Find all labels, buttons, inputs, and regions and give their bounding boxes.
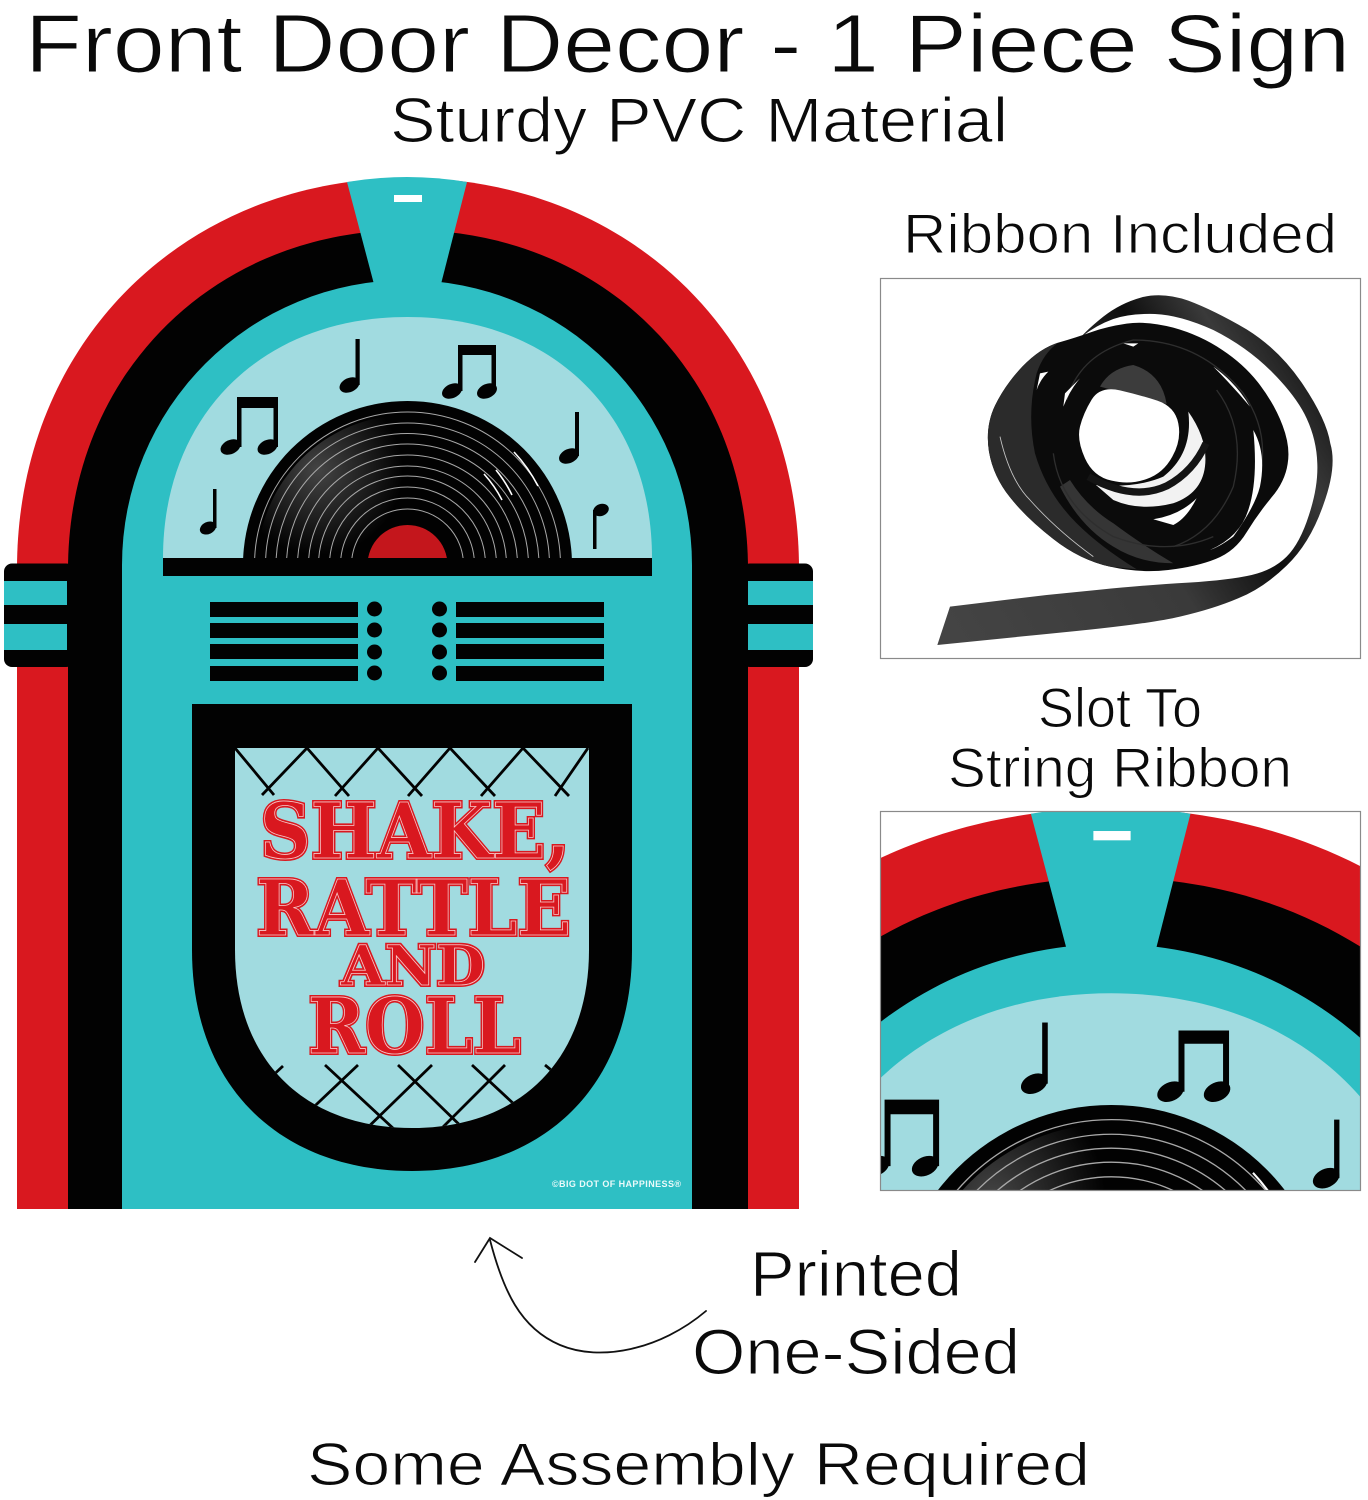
coil left band highlight — [988, 343, 1137, 569]
subtitle: Sturdy PVC Material — [390, 86, 1008, 156]
sign slogan: ROLL — [308, 982, 521, 1072]
coil openings — [1037, 343, 1262, 550]
edge highlight — [1000, 437, 1093, 557]
sign slogan: RATTLE — [256, 864, 571, 954]
shield black frame — [192, 704, 632, 1171]
jukebox sign — [4, 177, 813, 1209]
label: slot to string ribbon: Slot To — [1038, 676, 1202, 739]
sign slogan: ROLL — [308, 982, 521, 1072]
left side bracket — [4, 564, 74, 667]
outer loop and tail — [937, 295, 1333, 645]
sign slogan: AND — [340, 933, 485, 998]
window base bar — [163, 558, 652, 576]
teal top tab — [347, 177, 467, 288]
label: printed one-sided: One-Sided — [692, 1316, 1020, 1388]
right speaker grille — [432, 602, 604, 681]
coil ring lines — [1053, 340, 1263, 547]
black satin ribbon — [937, 295, 1333, 645]
sign slogan: SHAKE, — [260, 787, 570, 877]
sign slogan: RATTLE — [256, 864, 571, 954]
lattice lines — [235, 748, 588, 1135]
light window — [163, 317, 652, 558]
shield light fill — [235, 748, 589, 1128]
panel: ribbon photo — [880, 278, 1360, 658]
ribbon slot — [394, 195, 422, 202]
black inner frame — [68, 230, 748, 1209]
left speaker grille — [210, 602, 382, 681]
label: some assembly required: Some Assembly Required — [307, 1431, 1090, 1498]
label: printed one-sided — [692, 1238, 1020, 1388]
label: ribbon included: Ribbon Included — [903, 202, 1337, 265]
coil lower band highlight — [1060, 480, 1173, 563]
shield panel — [192, 704, 632, 1171]
label: slot to string ribbon: String Ribbon — [948, 736, 1292, 799]
teal body — [122, 280, 692, 1209]
panel: slot closeup — [880, 810, 1362, 1192]
music notes — [198, 339, 611, 549]
coil mass — [988, 323, 1288, 571]
jukebox arch top — [17, 177, 799, 1209]
red outer body — [17, 178, 799, 1209]
sign slogan: AND — [340, 933, 485, 998]
label: printed one-sided: Printed — [750, 1238, 962, 1310]
copyright: ©BIG DOT OF HAPPINESS® — [552, 1179, 681, 1189]
sign slogan — [256, 787, 571, 1072]
arrow — [475, 1238, 706, 1353]
right side bracket — [742, 564, 813, 667]
vinyl record — [243, 401, 572, 729]
dark strip across crescent — [1088, 443, 1206, 492]
label: slot to string ribbon — [948, 676, 1292, 799]
sign slogan: SHAKE, — [260, 787, 570, 877]
coil upper patch — [1100, 365, 1167, 404]
